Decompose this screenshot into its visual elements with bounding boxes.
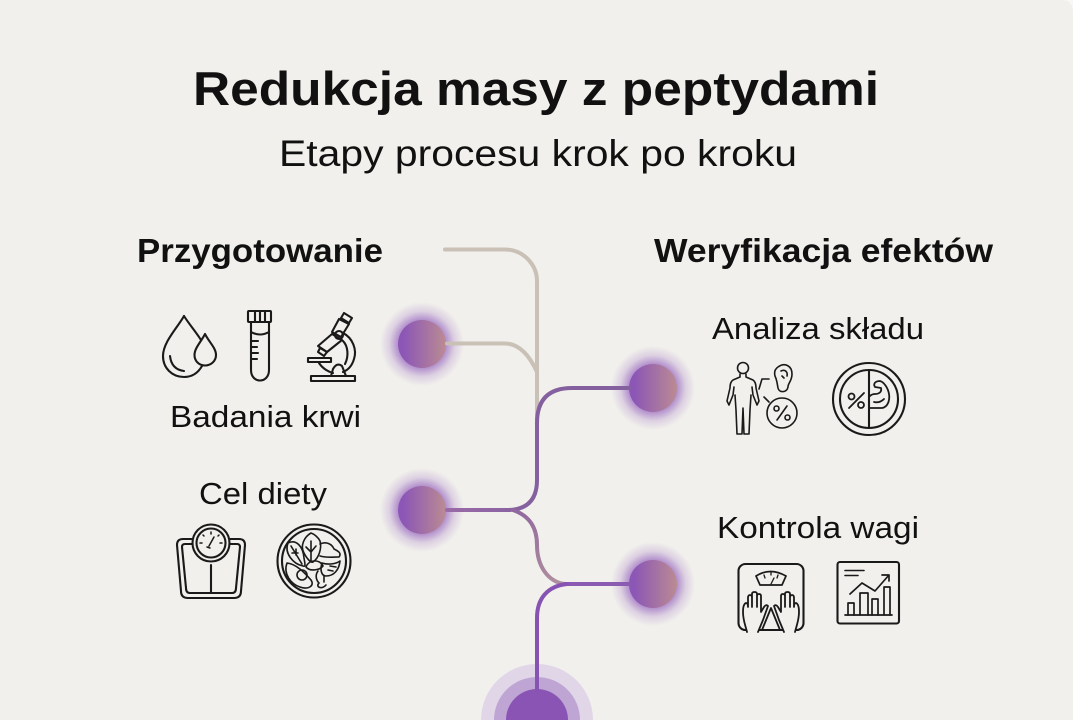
final node (481, 664, 593, 720)
node: Cel diety (380, 468, 464, 552)
icon: body composition (727, 362, 797, 434)
icon: test tube (248, 311, 271, 380)
heading: Przygotowanie: Przygotowanie (137, 232, 383, 269)
label: Badania krwi: Badania krwi (170, 399, 361, 434)
icon: food plate (278, 524, 350, 598)
icon: bathroom scale (177, 524, 245, 598)
icon: progress chart (838, 562, 899, 624)
icon: fat and muscle ratio (833, 363, 905, 435)
node: Badania krwi (380, 302, 464, 386)
icon: weighing hands (738, 564, 804, 632)
icon: microscope (308, 313, 355, 381)
label: Analiza składu: Analiza składu (712, 311, 924, 346)
node: Analiza składu (611, 346, 695, 430)
subtitle: Etapy procesu krok po kroku (279, 133, 797, 174)
icon: blood drops (163, 316, 216, 377)
node: Kontrola wagi (611, 542, 695, 626)
label: Kontrola wagi: Kontrola wagi (717, 510, 919, 545)
flow connector lines (445, 249, 630, 690)
label: Cel diety: Cel diety (199, 476, 328, 511)
heading: Weryfikacja efektów: Weryfikacja efektów (654, 232, 993, 269)
title: Redukcja masy z peptydami (193, 62, 879, 115)
